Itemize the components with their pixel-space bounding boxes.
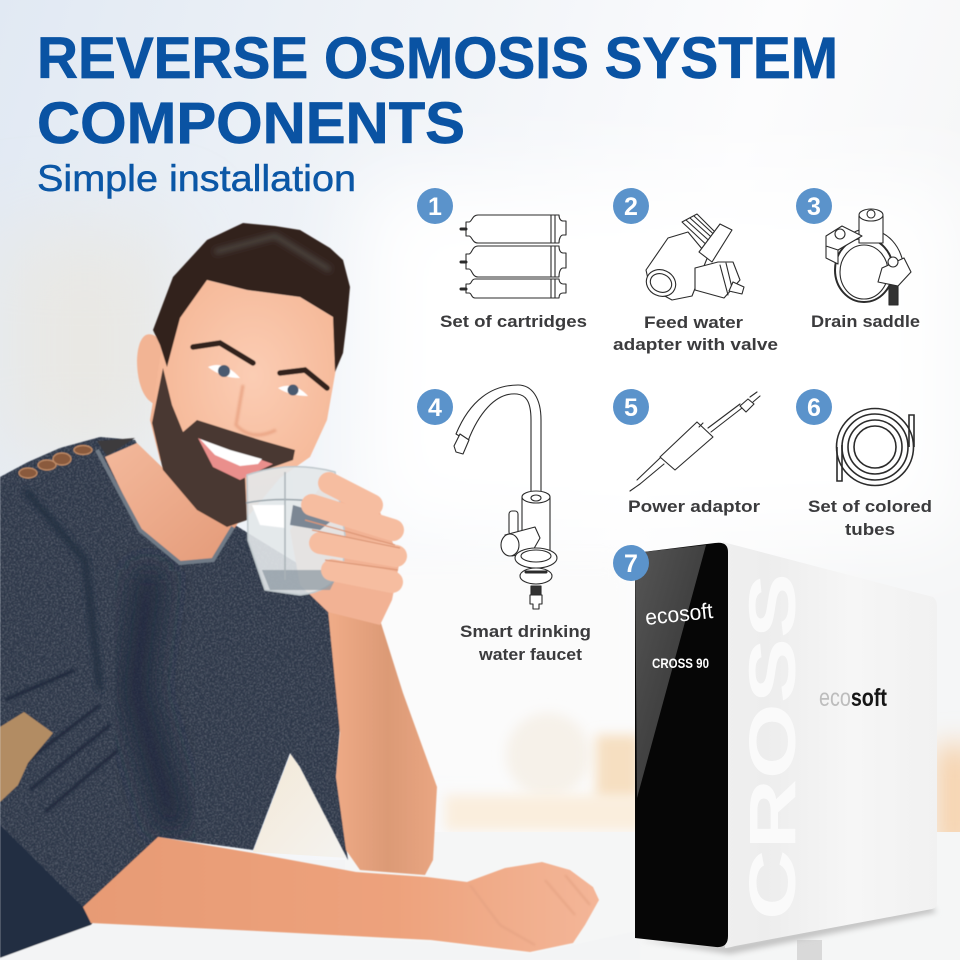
white side panel xyxy=(723,542,937,948)
neck xyxy=(105,443,240,563)
label: adapter with valve xyxy=(613,335,778,354)
face xyxy=(150,280,337,520)
black front panel xyxy=(635,543,728,947)
component 1: set of cartridges xyxy=(417,188,587,331)
eyebrows xyxy=(193,343,327,388)
beard xyxy=(152,368,295,527)
icon: cartridges xyxy=(461,215,566,298)
badge 4 xyxy=(417,389,453,425)
component 2: feed water adapter xyxy=(613,188,778,354)
photo: man drinking water xyxy=(0,223,640,960)
badge 6 xyxy=(796,389,832,425)
component 6: colored tubes xyxy=(796,389,932,539)
badge 1: 1 xyxy=(428,193,442,221)
front branding xyxy=(644,598,714,671)
icon: tube coil xyxy=(836,408,914,486)
nose xyxy=(236,385,276,435)
sweater xyxy=(0,437,348,958)
table edge xyxy=(0,925,640,960)
badge 4: 4 xyxy=(428,394,442,422)
label xyxy=(808,497,932,539)
badge 7: 7 xyxy=(624,550,638,578)
component 5: power adaptor xyxy=(613,389,760,516)
component 4: faucet xyxy=(417,385,591,664)
badge 2 xyxy=(613,188,649,224)
title: REVERSE OSMOSIS SYSTEM xyxy=(37,26,838,91)
label: tubes xyxy=(845,520,895,539)
vertical forearm xyxy=(328,610,437,875)
ear xyxy=(137,334,168,405)
label: water faucet xyxy=(478,645,582,664)
title: COMPONENTS xyxy=(37,91,465,156)
label: Set of colored xyxy=(808,497,932,516)
front branding: CROSS 90 xyxy=(652,655,709,671)
icon: adapter valve xyxy=(642,214,744,301)
subtitle: Simple installation xyxy=(37,158,356,199)
horizontal forearm xyxy=(83,837,599,952)
elbow patch xyxy=(0,712,53,802)
mouth xyxy=(198,438,273,480)
badge 7 xyxy=(613,545,649,581)
label xyxy=(613,313,778,354)
hair xyxy=(153,223,350,372)
label: Smart drinking xyxy=(460,622,591,641)
title xyxy=(37,26,838,156)
label: Drain saddle xyxy=(811,312,920,331)
badge 5 xyxy=(613,389,649,425)
front branding: ecosoft xyxy=(644,598,714,630)
badge 6: 6 xyxy=(807,394,821,422)
label: Feed water xyxy=(644,313,743,332)
badge 2: 2 xyxy=(624,193,638,221)
side logo: ecosoft xyxy=(819,684,888,712)
icon: faucet xyxy=(454,385,557,609)
badge 5: 5 xyxy=(624,394,638,422)
shoulder buttons xyxy=(19,446,92,478)
side lettering CROSS: CROSS xyxy=(735,573,809,920)
component 7: Ecosoft Cross 90 unit xyxy=(613,542,937,960)
hand and glass xyxy=(246,467,400,625)
icon: drain saddle xyxy=(826,209,911,305)
badge 1 xyxy=(417,188,453,224)
label xyxy=(460,622,591,664)
eyes xyxy=(208,365,308,396)
label: Power adaptor xyxy=(628,497,760,516)
product shadow xyxy=(640,905,937,954)
gloss highlight xyxy=(635,545,706,798)
badge 3 xyxy=(796,188,832,224)
component 3: drain saddle xyxy=(796,188,920,331)
icon: power adaptor xyxy=(630,392,760,491)
label: Set of cartridges xyxy=(440,312,587,331)
product stand xyxy=(797,940,822,960)
badge 3: 3 xyxy=(807,193,821,221)
